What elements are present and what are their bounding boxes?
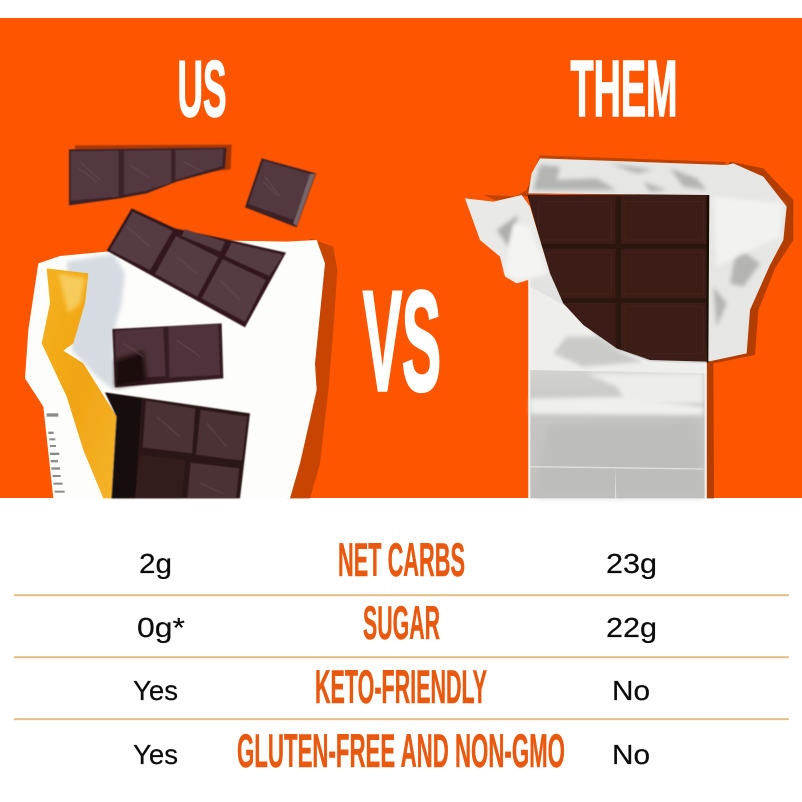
row: sugar: 0g* (137, 612, 185, 643)
row: net carbs: 23g (606, 548, 657, 579)
crumpled foil: left (465, 195, 550, 283)
row: keto-friendly: No (612, 675, 650, 706)
row: keto-friendly (133, 660, 650, 713)
row: net carbs: NET CARBS (338, 533, 465, 586)
row: sugar (137, 596, 657, 649)
row: keto-friendly: Yes (133, 675, 178, 706)
chocolate piece: single square (245, 158, 316, 227)
row: gluten-free and non-gmo: No (612, 739, 650, 770)
row: net carbs: 2g (139, 548, 172, 579)
text: US (178, 44, 226, 133)
text: THEM (570, 44, 678, 133)
white wrapper (25, 240, 325, 498)
row: sugar: SUGAR (363, 596, 440, 649)
chocolate piece: two squares (112, 323, 223, 387)
chocolate piece: top strip (69, 145, 232, 205)
wrapper inner shade (67, 254, 125, 390)
illustration: their foil-wrapped chocolate bar (465, 155, 793, 498)
row: gluten-free and non-gmo (133, 724, 650, 777)
row: gluten-free and non-gmo: Yes (133, 739, 178, 770)
text: VS (363, 262, 441, 421)
illustration: our opened chocolate bar (25, 145, 337, 498)
row: keto-friendly: KETO-FRIENDLY (315, 660, 487, 713)
row: net carbs (139, 533, 657, 586)
nutrition print (47, 413, 65, 493)
chocolate piece: angled block (107, 208, 286, 327)
chocolate bar (527, 194, 709, 362)
panel: orange comparison background (0, 18, 802, 498)
row: sugar: 22g (606, 612, 657, 643)
gold inner wrapper (42, 268, 117, 498)
wrapper shadow (287, 238, 337, 498)
chocolate piece: lower bar (105, 392, 250, 498)
crumpled foil: top and right (528, 158, 787, 362)
foil shadow (707, 162, 793, 498)
comparison table (14, 533, 789, 777)
lower foil sheet (528, 273, 707, 498)
